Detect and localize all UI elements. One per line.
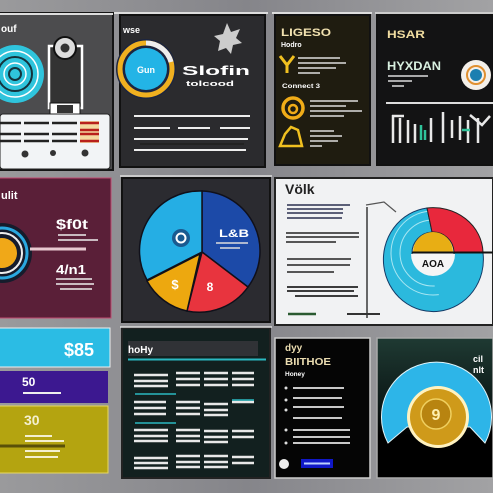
text block 3 <box>287 259 351 272</box>
half disk: yellow <box>413 232 453 252</box>
list text 3 <box>310 131 342 146</box>
icon: gold hat <box>280 127 302 146</box>
description <box>388 76 428 86</box>
leader line <box>366 202 396 212</box>
panel: table <box>120 327 272 478</box>
chart: donut <box>383 208 493 312</box>
list text 2 <box>310 101 362 116</box>
divider <box>386 102 493 104</box>
sub label: tolcood <box>186 79 235 88</box>
icon: concentric circles <box>0 45 44 103</box>
panel: signal chart <box>375 13 493 165</box>
bullets <box>284 386 288 444</box>
pie label blue: L&B <box>219 228 249 240</box>
red table cell <box>80 121 99 143</box>
label <box>23 392 61 394</box>
icon: tower <box>49 37 82 116</box>
footer labels <box>288 313 316 315</box>
heading: list: LIGESO <box>281 27 332 39</box>
axis <box>366 207 368 318</box>
icon: target ring <box>461 60 491 90</box>
icon: check <box>280 56 294 73</box>
slice: yellow <box>147 254 200 311</box>
white table card <box>0 114 110 169</box>
bar chart <box>392 112 490 143</box>
panel: maroon <box>0 178 111 318</box>
heading: gauge panel: wse <box>122 25 140 35</box>
panel: pie chart <box>120 176 272 322</box>
sub heading: Hodro <box>281 42 302 49</box>
chart: pie <box>139 191 260 312</box>
center label: AOA <box>422 259 444 270</box>
panel: white donut report <box>275 178 493 325</box>
icon: gold circle <box>283 98 303 118</box>
text block 1 <box>287 205 350 218</box>
panel: yellow icon list <box>272 13 372 165</box>
icon: gold coin: 9 <box>432 407 441 424</box>
panel: tower diagram <box>0 13 113 170</box>
heading: tower panel: ouf <box>1 24 17 35</box>
side text: nlt <box>473 365 484 375</box>
chart: ring gauge <box>116 39 176 99</box>
value: $85 <box>64 340 94 360</box>
horizontal line <box>412 252 493 254</box>
side text <box>473 354 484 375</box>
big label: Slofin <box>182 63 250 78</box>
header band <box>128 341 258 356</box>
value: 50 <box>22 375 36 389</box>
stat: bottom: 4/n1 <box>56 262 86 277</box>
text rows <box>134 116 250 150</box>
panel: gauge summary <box>114 13 268 167</box>
side text: cil <box>473 354 483 364</box>
panel: cyan stat <box>0 328 110 367</box>
side band <box>0 444 65 448</box>
heading: maroon: ulit <box>1 190 18 202</box>
label row: Connect 3 <box>282 83 320 90</box>
teal row rules <box>135 394 254 423</box>
connector line <box>30 248 86 250</box>
footer label right <box>347 313 380 315</box>
value: 30 <box>24 412 40 428</box>
panel: gold coin arc <box>377 338 493 478</box>
slice: cyan <box>139 191 202 280</box>
title: BIITHOE <box>285 357 331 368</box>
heading: report: Völk <box>285 181 315 197</box>
heading: signal panel: HSAR <box>387 29 425 41</box>
arc: red <box>427 208 483 252</box>
bullets text <box>293 388 350 443</box>
pie label blue <box>216 228 249 248</box>
pie label yellow: $ <box>171 277 179 292</box>
button <box>301 459 333 468</box>
panel: olive stat <box>0 406 108 473</box>
arc: cyan <box>383 208 483 312</box>
subtitle: Honey <box>285 371 305 378</box>
pie icon <box>172 229 190 247</box>
center: white <box>411 254 455 276</box>
stat: top: $f0t <box>56 216 88 232</box>
chart: nested ring <box>0 223 32 283</box>
text <box>25 436 64 457</box>
teal line <box>128 358 266 360</box>
heading: table: hoHy <box>128 345 153 356</box>
slice: blue <box>202 191 260 287</box>
table icons <box>22 150 88 158</box>
chart: ring gauge: Gun <box>137 65 155 75</box>
star icon <box>214 23 242 54</box>
panel: purple stat <box>0 371 108 403</box>
text block 4 <box>287 287 358 296</box>
text block 2 <box>286 233 359 242</box>
slice: red <box>187 252 248 312</box>
icon: footer circle <box>279 459 289 469</box>
arc rings <box>391 211 475 295</box>
chart: cyan arch <box>382 362 491 443</box>
green subheading: HYXDAN <box>387 59 441 73</box>
heading: black list: dyy <box>285 343 303 354</box>
list text 1 <box>298 58 346 73</box>
pie label red: 8 <box>207 280 214 294</box>
table rows <box>134 373 254 468</box>
panel: black bullet list <box>275 338 370 478</box>
